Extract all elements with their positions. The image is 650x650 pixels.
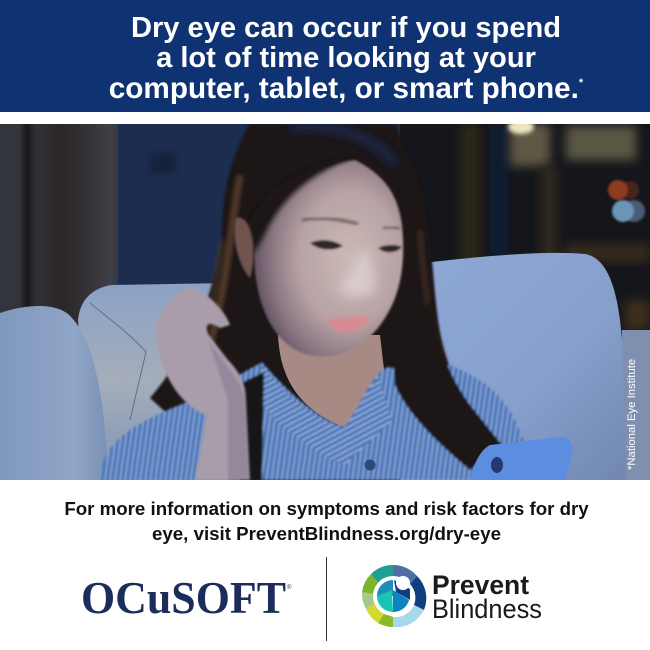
source note: National Eye Institute: *National Eye Institute [626,359,638,470]
woman: face [235,158,403,356]
woman: hair [149,124,451,428]
woman: neck [278,335,385,428]
woman: shirt [100,300,545,480]
logo: OCuSOFT: ® [287,584,292,591]
sofa: right back cushion [400,253,650,480]
logo: OCuSOFT: OCuSOFT [81,573,286,623]
photo: woman looking at phone at night on sofa [0,124,650,480]
information text: For more information on symptoms and risk factors for dry [64,498,589,519]
background: curtain and wall [0,124,650,480]
logo: Prevent Blindness: Prevent [432,570,529,600]
heading banner: Dry eye can occur if you spend [131,12,561,44]
information text [64,498,589,544]
logo: Prevent Blindness [362,565,542,627]
heading banner [0,0,650,112]
heading banner: a lot of time looking at your [156,42,536,74]
heading banner: computer, tablet, or smart phone.* [109,72,583,105]
phone [470,437,572,480]
shirt button [364,460,376,470]
logos row [81,557,542,641]
information text: eye, visit PreventBlindness.org/dry-eye [152,523,501,544]
icon: eye ring [362,565,426,627]
sofa: left cushions [0,283,230,480]
divider line [326,557,327,641]
woman: hand and forearm [155,287,250,480]
logo: Prevent Blindness: Blindness [432,594,542,624]
background: blurred night window with bokeh lights [460,120,650,330]
